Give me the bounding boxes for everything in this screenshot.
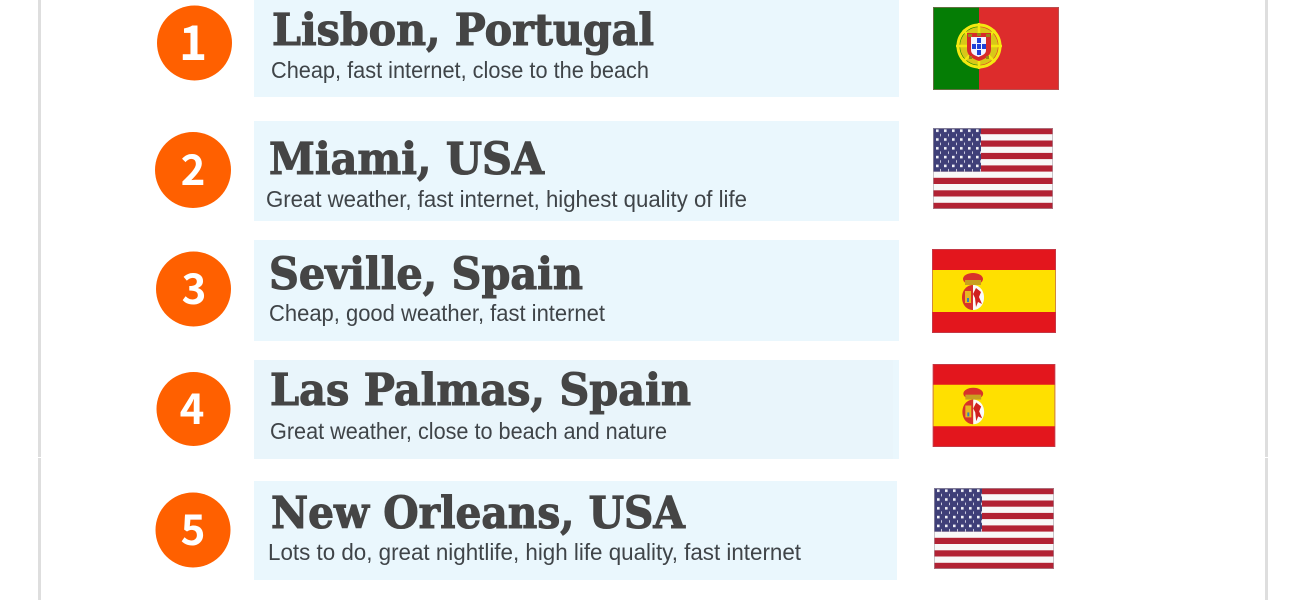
number badge 3 [156,252,231,326]
number badge 1 [157,4,232,80]
number badge 5: 5 [181,497,205,558]
panel: Las Palmas [254,360,899,459]
number badge 5 [156,492,230,568]
number badge 4: 4 [180,376,204,437]
description: Lisbon: Cheap, fast internet, close to the beach [271,57,649,83]
description: Seville: Cheap, good weather, fast internet [269,300,606,326]
heading: Miami: Miami, USA [269,134,545,185]
number badge 2: 2 [181,137,205,198]
number badge 1: 1 [179,4,207,74]
heading: Las Palmas: Las Palmas, Spain [270,365,691,416]
number badge 3: 3 [182,256,206,317]
panel: New Orleans [254,481,897,580]
rank 4: Las Palmas, Spain [156,360,1055,459]
description: Las Palmas: Great weather, close to beach and nature [270,418,667,444]
icon: flag of Spain [932,249,1056,333]
panel: Miami [254,121,899,221]
rank 5: New Orleans, USA [156,481,1054,580]
rank 3: Seville, Spain [156,240,1056,341]
number badge 2 [155,132,231,208]
panel: Seville [254,240,899,341]
rank 2: Miami, USA [155,121,1053,221]
icon: flag of USA [934,488,1054,569]
heading: Seville: Seville, Spain [269,249,583,300]
icon: flag of USA [933,128,1053,209]
number badge 4 [156,372,230,446]
description: Miami: Great weather, fast internet, highest quality of life [266,186,747,212]
icon: flag of Spain [933,364,1055,447]
description: New Orleans: Lots to do, great nightlife, high life quality, fast internet [268,539,802,565]
panel: Lisbon [254,0,899,97]
heading: New Orleans: New Orleans, USA [271,488,686,539]
rank 1: Lisbon, Portugal [157,0,1059,97]
icon: flag of Portugal [933,7,1059,90]
heading: Lisbon: Lisbon, Portugal [272,5,654,56]
